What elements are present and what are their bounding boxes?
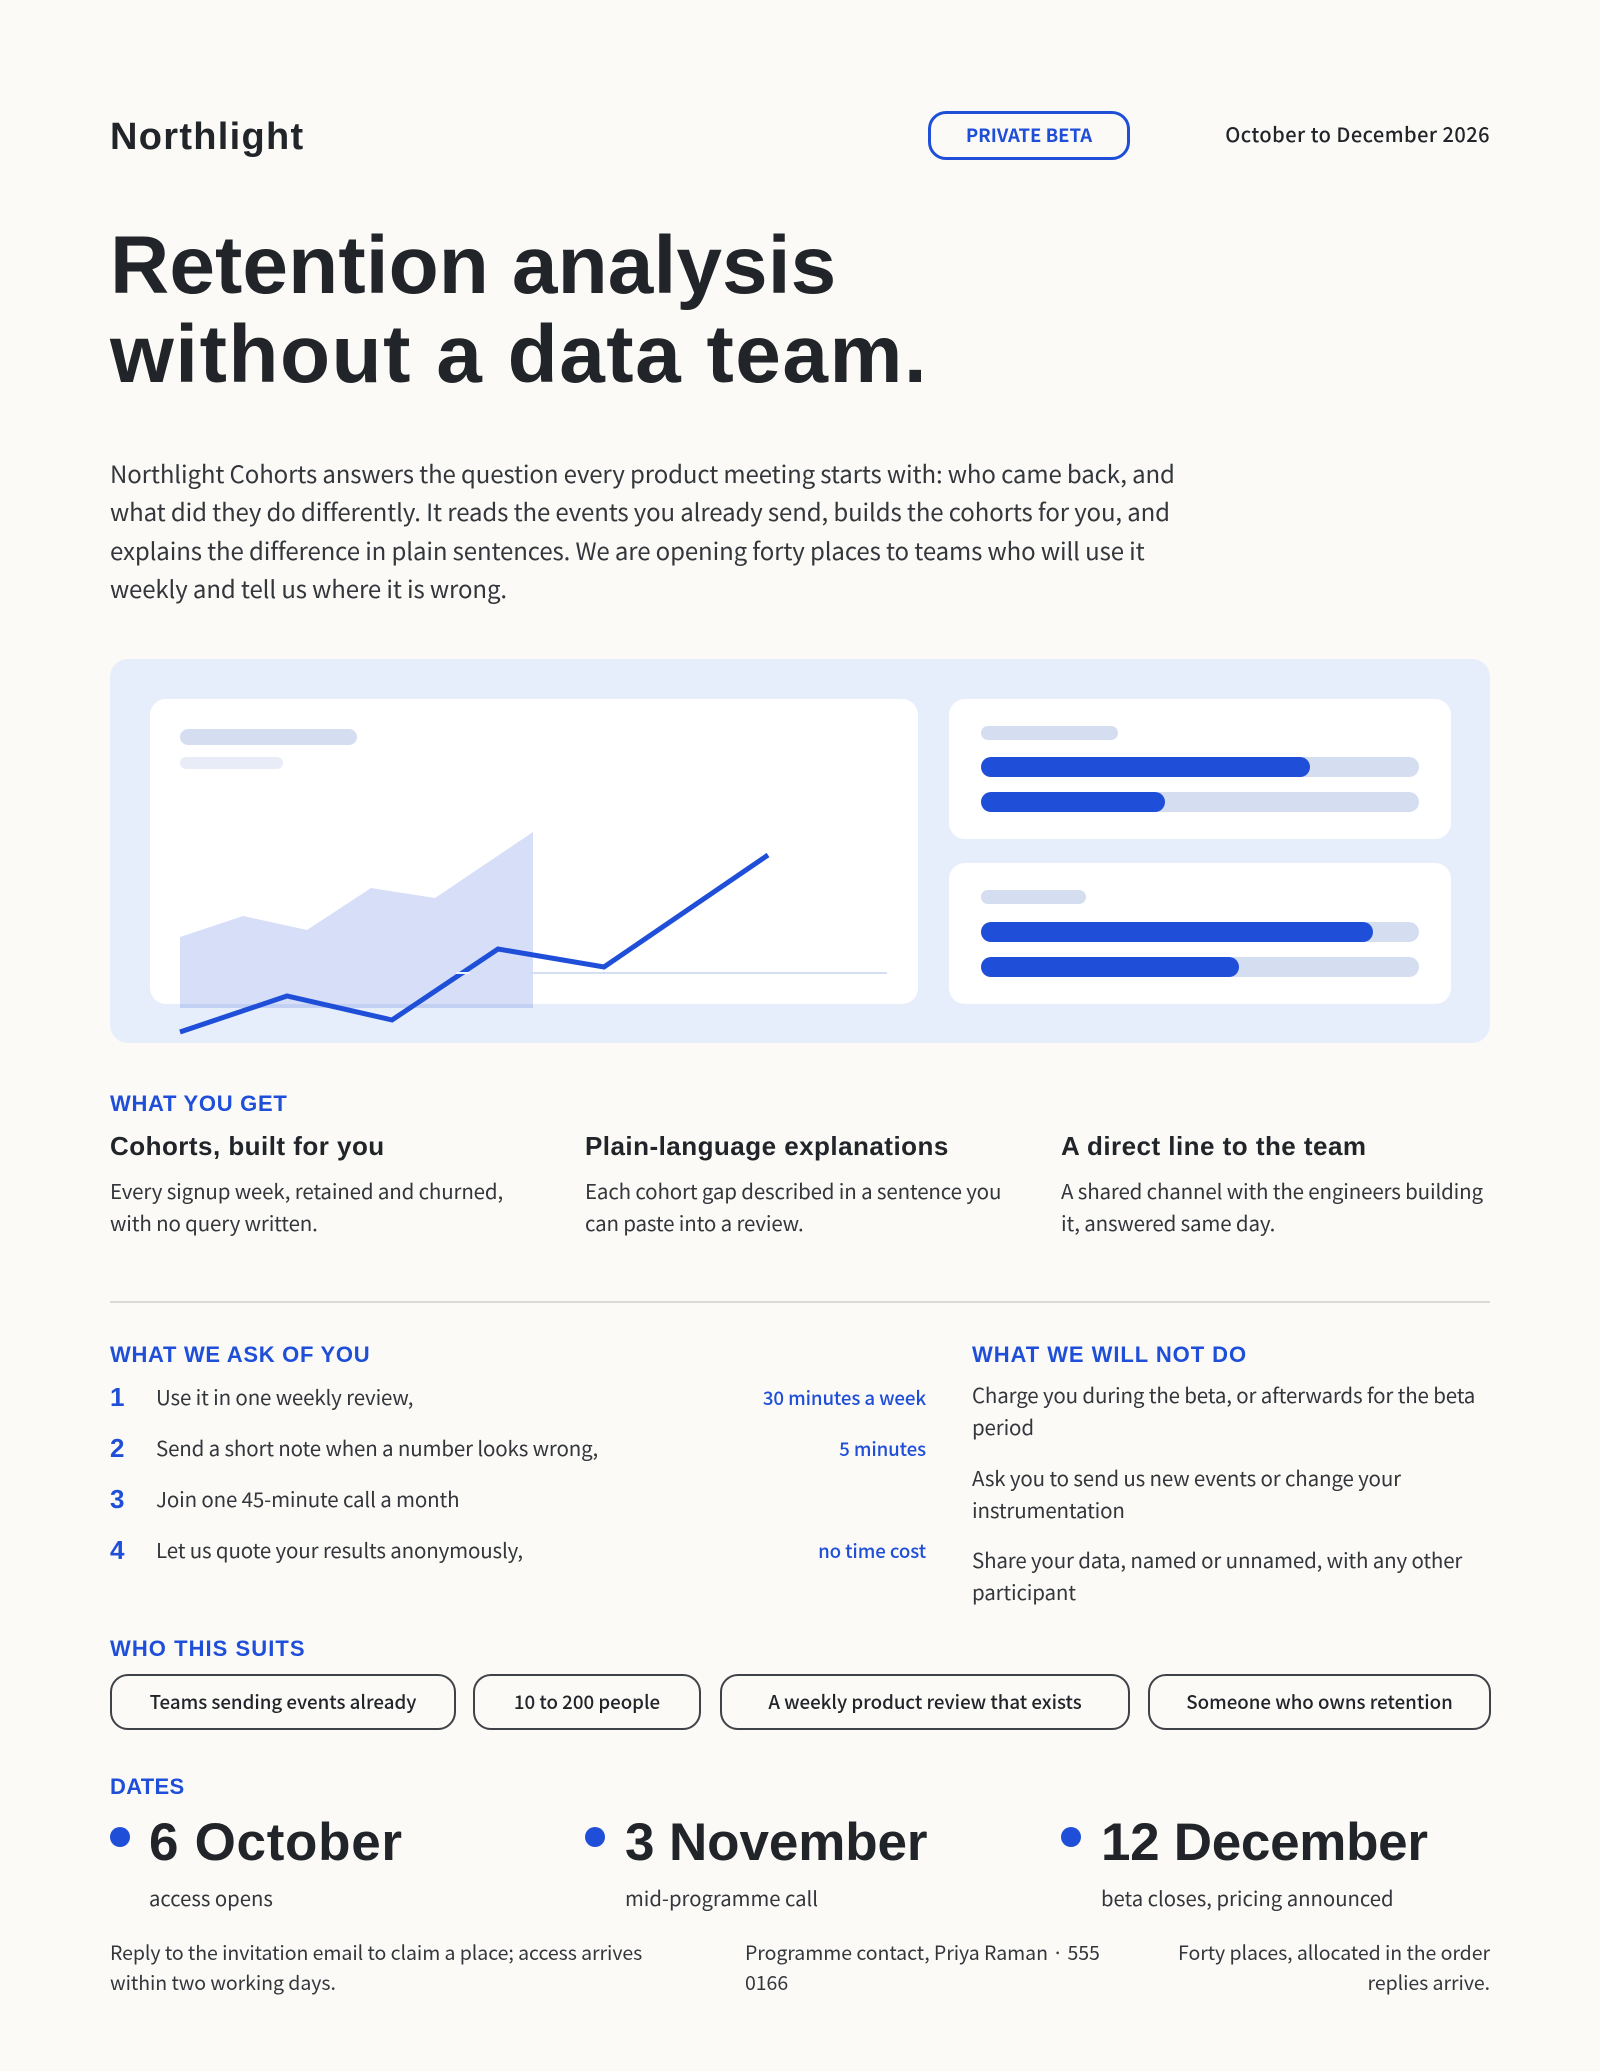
footer: contact: Programme contact, Priya Raman · 555 <box>745 1937 1100 1966</box>
bar fill four <box>981 957 1239 977</box>
bar fill two <box>981 792 1165 812</box>
footer: how to claim <box>110 1937 642 1996</box>
tag <box>720 1674 1130 1730</box>
item: events: instrumentation <box>972 1494 1125 1524</box>
card: top metrics <box>949 699 1451 839</box>
feature: explanations: can paste into a review. <box>585 1207 804 1237</box>
footer: allocation: replies arrive. <box>1368 1967 1490 1996</box>
marker <box>1061 1827 1081 1847</box>
intro paragraph: weekly and tell us where it is wrong. <box>110 570 507 605</box>
bar fill three <box>981 922 1373 942</box>
logo: Northlight: Northlight <box>110 116 305 158</box>
item 1: Use it in one weekly review, <box>156 1381 413 1411</box>
badge: private beta <box>928 111 1130 160</box>
tag <box>1148 1674 1491 1730</box>
item 2: Send a short note when a number looks wrong, <box>156 1432 598 1462</box>
bar track one <box>981 757 1419 777</box>
caption: mid-programme call <box>625 1882 818 1912</box>
section: what you get <box>110 1091 1483 1237</box>
section: what we will not do <box>972 1342 1475 1606</box>
bar track four <box>981 957 1419 977</box>
skeleton: chart subtitle <box>180 757 283 769</box>
intro paragraph: what did they do differently. It reads the events you already send, builds the cohorts for you, and <box>110 493 1170 528</box>
heading: dates: DATES <box>110 1774 184 1799</box>
item: events: Ask you to send us new events or change your <box>972 1462 1401 1492</box>
marker <box>585 1827 605 1847</box>
bar track three <box>981 922 1419 942</box>
item 1: 1 <box>110 1382 124 1412</box>
item: data: Share your data, named or unnamed, with any other <box>972 1544 1462 1574</box>
tags: who this suits <box>110 1674 1491 1730</box>
date label: 6 October <box>149 1813 403 1872</box>
item 2 <box>110 1432 926 1463</box>
feature: explanations: Plain-language explanations <box>585 1131 949 1161</box>
panel: product illustration <box>110 659 1490 1043</box>
date: 6 October <box>110 1813 403 1912</box>
item: charge: period <box>972 1411 1034 1441</box>
title: Retention analysis <box>110 220 836 311</box>
feature: cohorts: with no query written. <box>110 1207 318 1237</box>
item 4: 4 <box>110 1535 124 1565</box>
item: data: participant <box>972 1576 1076 1606</box>
caption: beta closes, pricing announced <box>1101 1882 1394 1912</box>
footer: contact <box>745 1937 1100 1996</box>
footer: contact: 0166 <box>745 1967 788 1996</box>
feature: explanations: Each cohort gap described in a sentence you <box>585 1175 1001 1205</box>
caption: access opens <box>149 1882 273 1912</box>
intro paragraph: Northlight Cohorts answers the question every product meeting starts with: who came back, and <box>110 455 1175 490</box>
tag: 10 to 200 people <box>514 1688 660 1715</box>
feature: explanations <box>585 1131 1001 1237</box>
item 3: Join one 45-minute call a month <box>156 1483 459 1513</box>
item 4 <box>110 1534 926 1565</box>
footer: how to claim: within two working days. <box>110 1967 336 1996</box>
item 2: 5 minutes <box>839 1435 926 1462</box>
item: data <box>972 1544 1462 1606</box>
card: bottom metrics <box>949 863 1451 1004</box>
item 4: no time cost <box>818 1537 926 1564</box>
section: what we ask of you <box>110 1342 926 1565</box>
date: 3 November <box>585 1813 927 1912</box>
divider <box>110 1301 1490 1303</box>
tag <box>473 1674 701 1730</box>
heading: WHAT WE ASK OF YOU <box>110 1342 370 1367</box>
item: charge: Charge you during the beta, or afterwards for the beta <box>972 1379 1475 1409</box>
feature: cohorts <box>110 1131 503 1237</box>
title <box>110 220 928 400</box>
tag: A weekly product review that exists <box>768 1688 1082 1715</box>
footer: allocation <box>1178 1937 1490 1996</box>
feature: direct line: A shared channel with the engineers building <box>1061 1175 1483 1205</box>
feature: direct line <box>1061 1131 1483 1237</box>
bar fill one <box>981 757 1310 777</box>
feature: direct line: it, answered same day. <box>1061 1207 1275 1237</box>
heading: WHAT YOU GET <box>110 1091 287 1116</box>
heading: who this suits: WHO THIS SUITS <box>110 1636 306 1661</box>
item 1 <box>110 1381 926 1412</box>
marker <box>110 1827 130 1847</box>
skeleton: bottom metrics label <box>981 890 1086 904</box>
date label: 12 December <box>1101 1813 1428 1872</box>
bar track two <box>981 792 1419 812</box>
card: main chart <box>150 699 918 1004</box>
tag <box>110 1674 456 1730</box>
badge: private beta: PRIVATE BETA <box>966 122 1092 148</box>
item 3: 3 <box>110 1484 124 1514</box>
feature: cohorts: Every signup week, retained and churned, <box>110 1175 503 1205</box>
skeleton: chart title <box>180 729 357 745</box>
intro paragraph <box>110 455 1175 605</box>
item 1: 30 minutes a week <box>763 1384 926 1411</box>
date label: 3 November <box>625 1813 927 1872</box>
date: 12 December <box>1061 1813 1428 1912</box>
item: events <box>972 1462 1402 1524</box>
item 2: 2 <box>110 1433 124 1463</box>
footer: how to claim: Reply to the invitation email to claim a place; access arrives <box>110 1937 642 1966</box>
intro paragraph: explains the difference in plain sentences. We are opening forty places to teams who will use it <box>110 532 1145 567</box>
tag: Someone who owns retention <box>1186 1688 1453 1715</box>
heading: WHAT WE WILL NOT DO <box>972 1342 1247 1367</box>
footer: allocation: Forty places, allocated in the order <box>1178 1937 1490 1966</box>
item: charge <box>972 1379 1475 1441</box>
feature: cohorts: Cohorts, built for you <box>110 1131 385 1161</box>
feature: direct line: A direct line to the team <box>1061 1131 1367 1161</box>
item 4: Let us quote your results anonymously, <box>156 1534 523 1564</box>
tag: Teams sending events already <box>150 1688 416 1715</box>
skeleton: top metrics label <box>981 726 1118 740</box>
programme dates: October to December 2026 <box>1225 119 1490 148</box>
title: without a data team. <box>110 309 928 400</box>
